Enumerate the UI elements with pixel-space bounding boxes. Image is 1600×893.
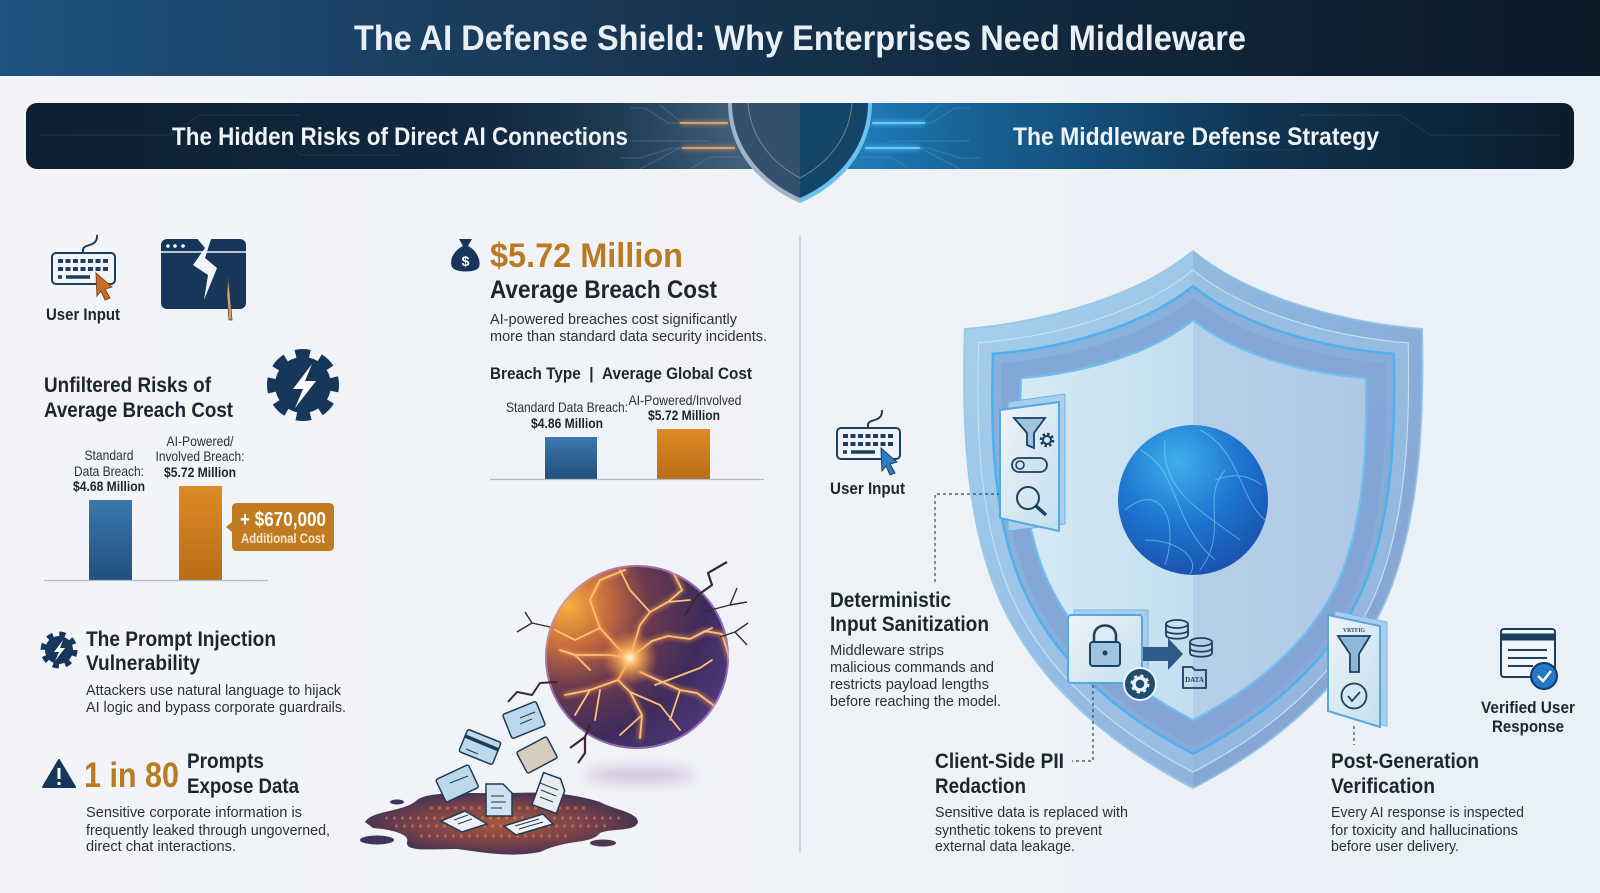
bar label: ai-powered: $5.72 Million (648, 407, 720, 423)
text block: pii redaction: Redaction (935, 775, 1026, 798)
icon: keyboard with orange cursor (52, 235, 115, 300)
icon: gear with lightning (265, 347, 341, 423)
text block: prompt injection: The Prompt Injection (86, 628, 276, 651)
falling data cards and documents (436, 701, 568, 835)
text block: data exposure (86, 804, 330, 855)
text block: breach description (490, 311, 767, 345)
stat: 1 in 80 prompts: Expose Data (187, 775, 299, 798)
callout: additional cost: + $670,000 (240, 509, 326, 531)
bar label: ai-powered (156, 433, 244, 480)
text block: input sanitization: Input Sanitization (830, 613, 989, 636)
bar chart: global cost (490, 392, 764, 480)
icon: verified response window (1501, 629, 1557, 689)
bar label: standard: Data Breach: (74, 463, 144, 479)
stat: 1 in 80 prompts: Prompts (187, 750, 264, 773)
text block: post-generation verification: before user delivery. (1331, 838, 1459, 855)
text block: data exposure: direct chat interactions. (86, 838, 236, 855)
text block: data exposure: frequently leaked through ungoverned, (86, 822, 330, 839)
text block: prompt injection (86, 628, 346, 716)
icon: band shield (728, 103, 872, 203)
panel: redaction tools (1068, 610, 1212, 700)
text block: input sanitization: malicious commands and (830, 659, 994, 676)
text block: pii redaction: Client-Side PII (935, 750, 1064, 773)
text block: post-generation verification: Every AI response is inspected (1331, 804, 1524, 821)
text block: post-generation verification (1331, 750, 1524, 855)
stat: 5.72 million: $5.72 Million (490, 237, 683, 275)
illustration: cracked sphere leaking data (360, 562, 748, 855)
panel: left risks (43, 235, 346, 855)
heading: unfiltered risks: Average Breach Cost (44, 399, 233, 422)
icon: money bag: $ (462, 253, 470, 269)
text block: prompt injection: Attackers use natural language to hijack (86, 682, 341, 699)
bar label: ai-powered: Involved Breach: (156, 448, 244, 464)
stat: 1 in 80 prompts: 1 in 80 (84, 756, 179, 795)
stat: 1 in 80 prompts (84, 750, 299, 798)
icon: money bag (451, 239, 480, 272)
illustration: large shield (964, 251, 1422, 788)
bar label: standard: $4.68 Million (73, 478, 145, 494)
band heading: defense: The Middleware Defense Strategy (1013, 123, 1379, 151)
text block: post-generation verification: Verification (1331, 775, 1435, 798)
text block: pii redaction: Sensitive data is replaced with (935, 804, 1128, 821)
text block: post-generation verification: Post-Generation (1331, 750, 1479, 773)
text block: input sanitization: restricts payload lengths (830, 676, 989, 693)
puddle (360, 793, 638, 855)
label: verified user response (1481, 698, 1575, 736)
callout: additional cost (226, 503, 334, 551)
callout: additional cost: Additional Cost (241, 530, 325, 546)
bar label: ai-powered: AI-Powered/Involved (628, 392, 742, 408)
panel: input sanitization tools (1000, 394, 1065, 531)
icon: warning triangle (43, 760, 75, 787)
bar label: standard: Standard Data Breach: (506, 399, 628, 415)
text block: data exposure: Sensitive corporate information is (86, 804, 302, 821)
text block: input sanitization: Deterministic (830, 589, 951, 612)
label: user input: User Input (46, 305, 120, 324)
dashed connectors (935, 494, 1354, 761)
heading: unfiltered risks (44, 374, 233, 422)
text block: input sanitization (830, 589, 1001, 710)
text block: prompt injection: AI logic and bypass corporate guardrails. (86, 699, 346, 716)
bar label: ai-powered (628, 392, 742, 423)
icon: keyboard with blue cursor (837, 410, 900, 475)
heading: unfiltered risks: Unfiltered Risks of (44, 374, 212, 397)
bar label: ai-powered: AI-Powered/ (166, 433, 234, 449)
text block: prompt injection: Vulnerability (86, 652, 200, 675)
panel: verification tools (1328, 611, 1387, 727)
panel: middleware defense (830, 251, 1575, 855)
icon: broken browser window (161, 236, 246, 320)
divider (799, 236, 801, 852)
panel: redaction tools: DATA (1185, 676, 1204, 684)
text block: pii redaction (935, 750, 1128, 855)
text block: input sanitization: Middleware strips (830, 642, 944, 659)
text block: pii redaction: synthetic tokens to prevent (935, 822, 1103, 839)
text block: post-generation verification: for toxicity and hallucinations (1331, 822, 1518, 839)
label: user input: User Input (830, 479, 905, 498)
label: verified user response: Verified User (1481, 698, 1575, 717)
text block: breach description: AI-powered breaches cost significantly (490, 311, 737, 328)
table heading: Breach Type | Average Global Cost (490, 364, 752, 383)
bar label: ai-powered: $5.72 Million (164, 464, 236, 480)
panel: average breach cost (360, 237, 767, 855)
section band with central shield (26, 103, 1574, 203)
globe (1118, 425, 1268, 575)
bar chart: average breach cost (44, 433, 334, 580)
heading: average breach cost: Average Breach Cost (490, 276, 718, 304)
bar label: standard (506, 399, 628, 431)
text block: breach description: more than standard data security incidents. (490, 328, 767, 345)
band heading: risks: The Hidden Risks of Direct AI Connections (172, 123, 628, 151)
title banner (0, 0, 1600, 76)
bar label: standard: $4.86 Million (531, 415, 603, 431)
title: The AI Defense Shield: Why Enterprises Need Middleware (354, 19, 1246, 58)
label: verified user response: Response (1492, 717, 1564, 736)
bar label: standard (73, 447, 145, 494)
icon: prompt injection badge (44, 634, 74, 666)
text block: input sanitization: before reaching the model. (830, 693, 1001, 710)
panel: verification tools: VRTFIG (1343, 628, 1365, 634)
bar label: standard: Standard (84, 447, 134, 463)
text block: pii redaction: external data leakage. (935, 838, 1075, 855)
